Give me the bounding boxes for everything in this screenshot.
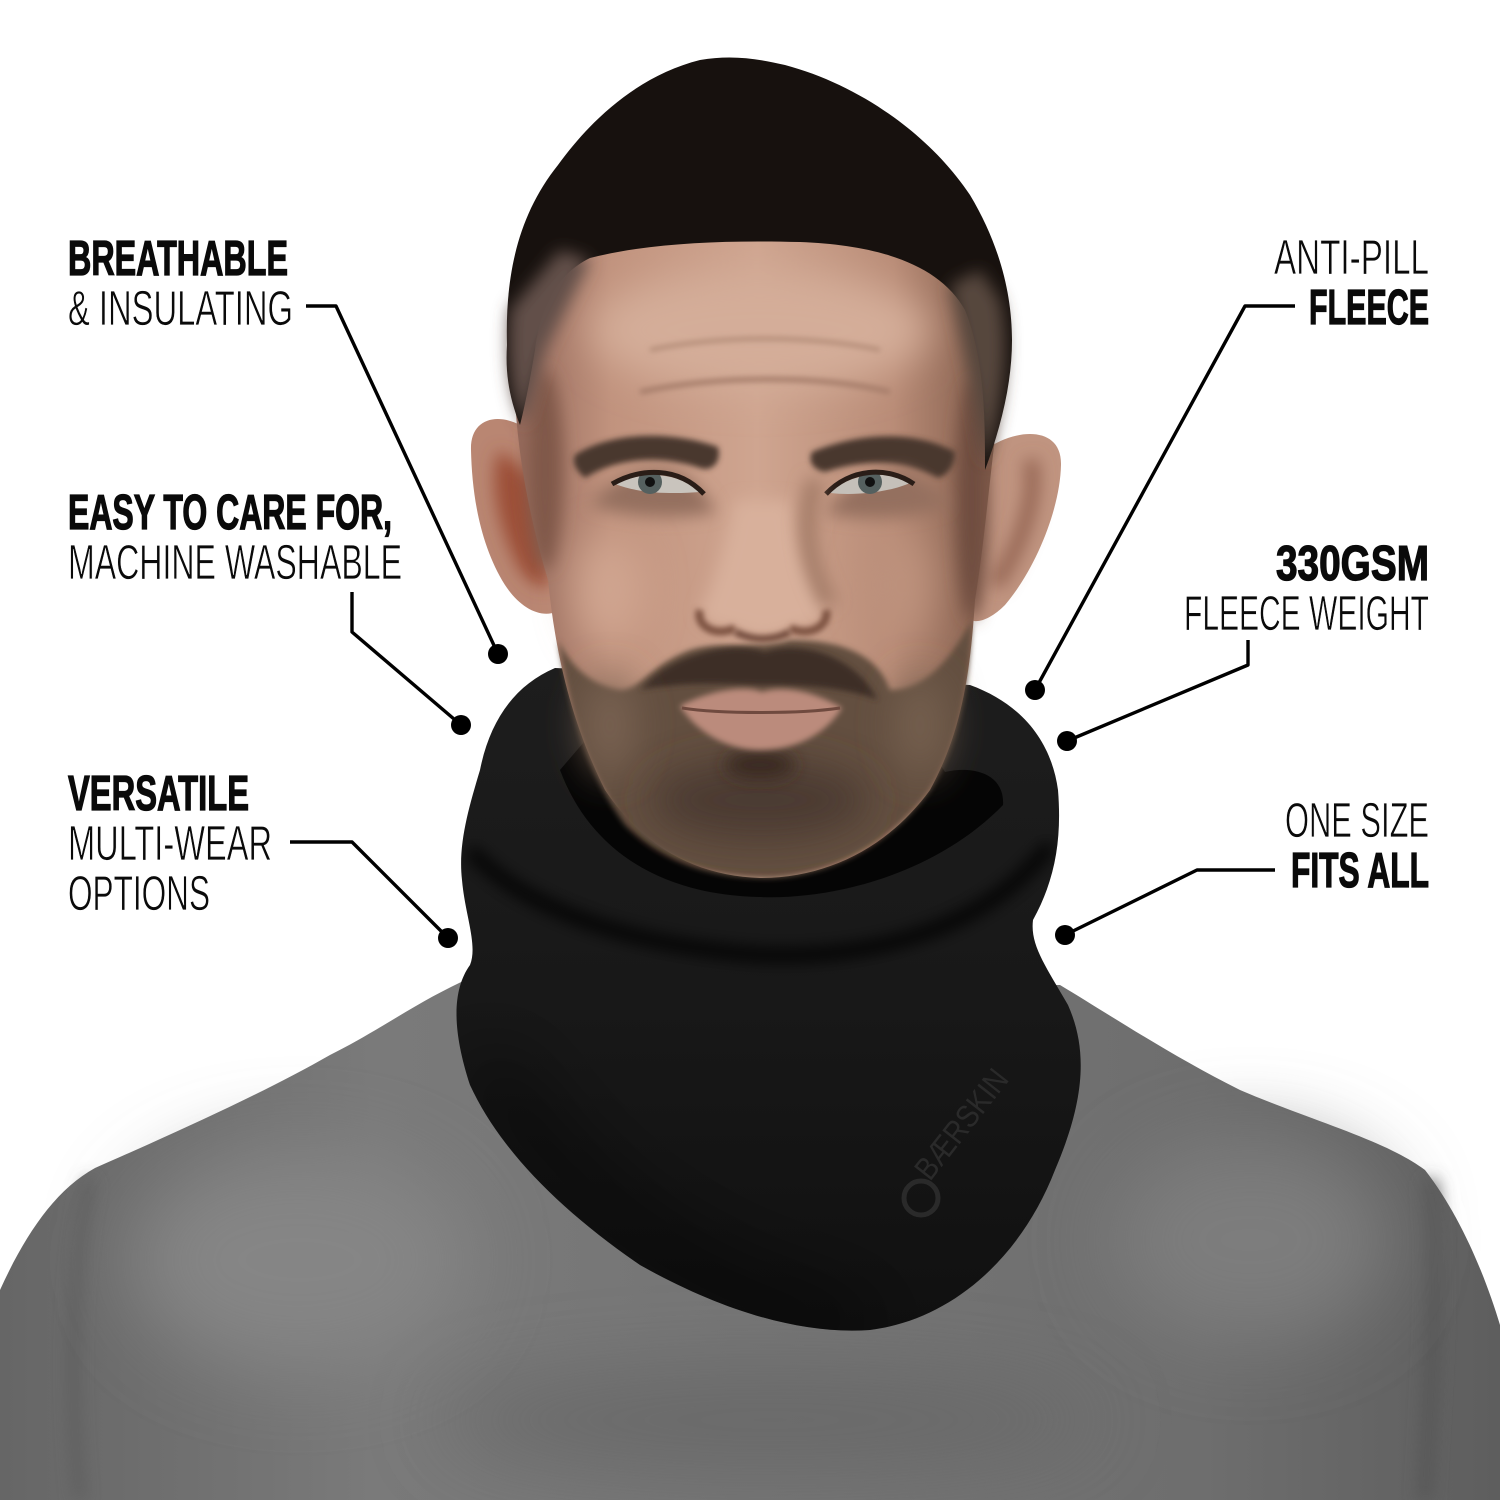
lips xyxy=(680,689,842,750)
heading: VERSATILE xyxy=(68,767,249,821)
callout: easy to care for xyxy=(68,486,471,735)
eyes xyxy=(590,469,950,518)
gaiter logo: BÆRSKIN xyxy=(907,1062,1016,1186)
leader dot xyxy=(1025,680,1045,700)
heading: BREATHABLE xyxy=(68,232,288,286)
hair xyxy=(507,58,1012,470)
leader line xyxy=(1067,640,1248,741)
ears xyxy=(471,419,1061,621)
gaiter logo mark xyxy=(904,1181,938,1215)
leader line xyxy=(306,306,498,654)
gaiter folds xyxy=(470,845,1050,1330)
subheading: & INSULATING xyxy=(68,282,293,336)
subheading: MACHINE WASHABLE xyxy=(68,536,402,590)
heading: FLEECE xyxy=(1309,281,1429,335)
eyebrows xyxy=(574,436,955,478)
leader dot xyxy=(488,644,508,664)
collar inner opening xyxy=(560,700,1003,897)
subheading line one: MULTI-WEAR xyxy=(68,817,272,871)
callout: one size fits all xyxy=(1055,794,1429,945)
leader line xyxy=(1035,306,1295,690)
face xyxy=(514,222,1000,878)
callout: breathable and insulating xyxy=(68,232,508,664)
callout: versatile xyxy=(68,767,458,948)
leader line xyxy=(1065,870,1275,935)
callout: anti-pill fleece xyxy=(1025,231,1429,700)
heading: 330GSM xyxy=(1276,537,1429,591)
grey t-shirt xyxy=(0,978,1500,1500)
hair fade at temples xyxy=(509,250,1005,465)
leader dot xyxy=(438,928,458,948)
leader line xyxy=(352,592,461,725)
subheading line two: OPTIONS xyxy=(68,867,210,921)
beard xyxy=(558,620,972,878)
leader dot xyxy=(451,715,471,735)
heading: FITS ALL xyxy=(1291,844,1429,898)
leader dot xyxy=(1057,731,1077,751)
nose xyxy=(699,480,830,639)
callout: 330gsm fleece weight xyxy=(1057,537,1429,751)
subheading: ANTI-PILL xyxy=(1274,231,1429,285)
leader line xyxy=(290,842,448,938)
heading: EASY TO CARE FOR, xyxy=(68,486,392,540)
face shading xyxy=(527,270,988,645)
fleece neck gaiter xyxy=(456,668,1081,1331)
leader dot xyxy=(1055,925,1075,945)
gaiter body xyxy=(456,668,1081,1331)
